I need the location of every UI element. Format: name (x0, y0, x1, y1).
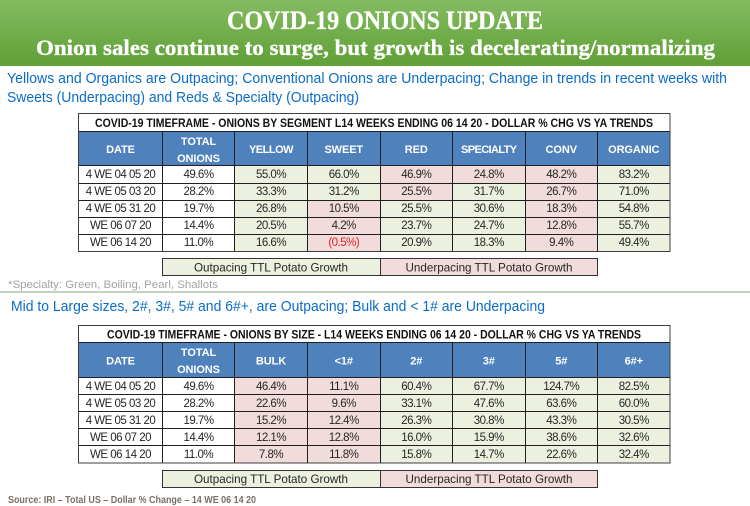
table row: WE 06 07 20: 23.7% (401, 220, 432, 232)
table row: WE 06 14 20: 14.7% (474, 449, 504, 461)
table row: 4 WE 05 31 20: 30.5% (619, 415, 649, 427)
table row: 4 WE 05 03 20: 4 WE 05 03 20 (86, 398, 155, 410)
table row: WE 06 14 20: WE 06 14 20 (90, 237, 151, 249)
legend: segment table (162, 258, 598, 276)
table row: 4 WE 05 03 20: 22.6% (256, 398, 286, 410)
table header row: YELLOW (249, 144, 294, 156)
table row: 4 WE 05 31 20: 18.3% (546, 203, 577, 215)
table header row: TOTAL (181, 136, 216, 148)
table header row: DATE (106, 356, 135, 368)
table header row: 5# (555, 356, 567, 368)
legend: segment table: Underpacing TTL Potato Growth (406, 260, 572, 274)
table row: WE 06 07 20: 4.2% (332, 220, 356, 232)
table row: 4 WE 05 03 20: 28.2% (183, 186, 214, 198)
table row: WE 06 14 20: 49.4% (619, 237, 649, 249)
table row: 4 WE 04 05 20: 4 WE 04 05 20 (86, 169, 155, 181)
table row: 4 WE 05 03 20: 71.0% (619, 186, 649, 198)
table row: 4 WE 05 31 20: 10.5% (329, 203, 359, 215)
table row: WE 06 07 20: WE 06 07 20 (90, 220, 151, 232)
table row: WE 06 14 20: 11.0% (184, 237, 213, 249)
table row: 4 WE 04 05 20: 46.4% (256, 381, 286, 393)
table header row: ONIONS (177, 153, 220, 165)
table row: 4 WE 04 05 20: 66.0% (329, 169, 359, 181)
table row: 4 WE 05 03 20: 33.3% (256, 186, 286, 198)
table header row: CONV (546, 144, 578, 156)
table title row (78, 114, 670, 131)
table row: 4 WE 05 31 20: 26.3% (401, 415, 432, 427)
table row: 4 WE 04 05 20: 49.6% (183, 169, 214, 181)
table header row: RED (405, 144, 428, 156)
table row: 4 WE 05 31 20: 19.7% (183, 415, 214, 427)
segment summary text: Sweets (Underpacing) and Reds & Specialty (Outpacing) (7, 90, 359, 106)
table row: WE 06 07 20 (78, 217, 670, 234)
table row: WE 06 07 20: 12.8% (546, 220, 577, 232)
table row: 4 WE 05 03 20: 31.7% (474, 186, 504, 198)
table row: 4 WE 04 05 20: 49.6% (183, 381, 214, 393)
table row: 4 WE 05 03 20: 26.7% (546, 186, 577, 198)
table row: 4 WE 05 31 20: 54.8% (619, 203, 649, 215)
table row: WE 06 07 20: 24.7% (474, 220, 504, 232)
table row: WE 06 14 20: 16.6% (256, 237, 286, 249)
table row: 4 WE 05 03 20: 47.6% (474, 398, 504, 410)
table header row: ORGANIC (608, 144, 660, 156)
table row: WE 06 07 20: 32.6% (619, 432, 649, 444)
table header row: SPECIALTY (461, 144, 518, 156)
table row: 4 WE 04 05 20: 82.5% (619, 381, 649, 393)
subtitle: Onion sales continue to surge, but growth is decelerating/normalizing (36, 35, 715, 60)
table row: 4 WE 05 31 20: 26.8% (256, 203, 286, 215)
table row: WE 06 07 20: 20.5% (256, 220, 286, 232)
table row: 4 WE 05 31 20: 30.8% (474, 415, 504, 427)
table row: 4 WE 05 31 20 (78, 412, 670, 428)
table row: 4 WE 04 05 20: 60.4% (401, 381, 432, 393)
table row: 4 WE 05 31 20: 4 WE 05 31 20 (86, 203, 155, 215)
table row: WE 06 14 20: 11.0% (184, 449, 213, 461)
table header row: 6#+ (625, 356, 643, 368)
table row: WE 06 14 20: 7.8% (259, 449, 283, 461)
table row: 4 WE 04 05 20 (78, 166, 670, 183)
table row: 4 WE 05 03 20 (78, 183, 670, 200)
table row: 4 WE 04 05 20: 11.1% (329, 381, 359, 393)
table row: 4 WE 04 05 20: 55.0% (256, 169, 286, 181)
legend: size table: Outpacing TTL Potato Growth (194, 472, 348, 486)
table row: WE 06 07 20: 15.9% (474, 432, 504, 444)
table header row (78, 131, 670, 166)
table row: WE 06 14 20: 15.8% (401, 449, 432, 461)
legend: segment table: Outpacing TTL Potato Growth (194, 260, 348, 274)
table row: WE 06 07 20: 55.7% (619, 220, 649, 232)
table row: WE 06 14 20 (78, 234, 670, 252)
table row: 4 WE 05 03 20: 63.6% (546, 398, 577, 410)
title: COVID-19 ONIONS UPDATE (227, 6, 543, 35)
header banner (0, 0, 750, 66)
segment summary text (7, 71, 727, 106)
specialty footnote: *Specialty: Green, Boiling, Pearl, Shallots (8, 279, 219, 291)
table row: WE 06 14 20: 9.4% (549, 237, 574, 249)
table row: 4 WE 04 05 20 (78, 377, 670, 394)
legend: size table: Underpacing TTL Potato Growth (406, 472, 572, 486)
table header row: SWEET (324, 144, 363, 156)
table row: 4 WE 05 03 20: 4 WE 05 03 20 (86, 186, 155, 198)
table row: WE 06 07 20 (78, 428, 670, 446)
table row: 4 WE 05 31 20: 43.3% (546, 415, 577, 427)
table row: 4 WE 04 05 20: 67.7% (474, 381, 504, 393)
table row: 4 WE 04 05 20: 24.8% (474, 169, 504, 181)
table header row: <1# (335, 356, 353, 368)
table row: WE 06 07 20: 38.6% (546, 432, 577, 444)
table row: WE 06 14 20: (0.5%) (328, 237, 360, 249)
table row: WE 06 14 20: 20.9% (401, 237, 432, 249)
table row: 4 WE 05 31 20: 25.5% (401, 203, 432, 215)
table row: WE 06 07 20: 12.1% (256, 432, 286, 444)
table title row: COVID-19 TIMEFRAME - ONIONS BY SIZE - L14 WEEKS ENDING 06 14 20 - DOLLAR % CHG VS YA TRENDS (107, 330, 641, 342)
table row: WE 06 07 20: WE 06 07 20 (90, 432, 151, 444)
table row: WE 06 14 20: 18.3% (474, 237, 504, 249)
table row: 4 WE 05 31 20: 12.4% (329, 415, 359, 427)
table row: 4 WE 05 03 20: 9.6% (332, 398, 356, 410)
table: onions by segment (78, 114, 670, 252)
table row: 4 WE 05 03 20: 33.1% (401, 398, 432, 410)
table row: WE 06 07 20: 12.8% (329, 432, 359, 444)
table row: WE 06 07 20: 14.4% (183, 432, 214, 444)
segment summary text: Yellows and Organics are Outpacing; Conventional Onions are Underpacing; Change in trends in recent weeks with (7, 71, 727, 87)
table header row: DATE (106, 144, 135, 156)
table row: WE 06 14 20: 22.6% (546, 449, 577, 461)
table row: 4 WE 05 31 20: 4 WE 05 31 20 (86, 415, 155, 427)
table header row: BULK (256, 356, 286, 368)
table row: WE 06 07 20: 16.0% (401, 432, 432, 444)
table row: 4 WE 05 03 20: 25.5% (401, 186, 432, 198)
table header row: 3# (483, 356, 495, 368)
table row: WE 06 14 20: WE 06 14 20 (90, 449, 151, 461)
table row: 4 WE 05 03 20 (78, 394, 670, 412)
table row: WE 06 14 20: 32.4% (619, 449, 649, 461)
table row: 4 WE 04 05 20: 46.9% (401, 169, 432, 181)
table row: 4 WE 05 31 20 (78, 200, 670, 217)
table title row (78, 325, 670, 342)
table: onions by size (78, 325, 670, 463)
legend: size table (162, 470, 598, 488)
table row: WE 06 07 20: 14.4% (183, 220, 214, 232)
table row: WE 06 14 20: 11.8% (329, 449, 359, 461)
table row: 4 WE 05 03 20: 31.2% (329, 186, 359, 198)
table row: 4 WE 04 05 20: 48.2% (546, 169, 577, 181)
table row: 4 WE 04 05 20: 83.2% (619, 169, 649, 181)
table row: 4 WE 05 03 20: 28.2% (183, 398, 214, 410)
size summary text: Mid to Large sizes, 2#, 3#, 5# and 6#+, are Outpacing; Bulk and < 1# are Underpacing (11, 299, 545, 315)
table title row: COVID-19 TIMEFRAME - ONIONS BY SEGMENT L14 WEEKS ENDING 06 14 20 - DOLLAR % CHG VS YA TRENDS (95, 118, 653, 130)
table header row: TOTAL (181, 347, 216, 359)
table row: 4 WE 05 31 20: 30.6% (474, 203, 504, 215)
table row: 4 WE 04 05 20: 4 WE 04 05 20 (86, 381, 155, 393)
table row: 4 WE 04 05 20: 124.7% (543, 381, 580, 393)
table header row: ONIONS (177, 364, 220, 376)
table header row: 2# (410, 356, 422, 368)
table row: 4 WE 05 31 20: 19.7% (183, 203, 214, 215)
table header row (78, 342, 670, 377)
source note: Source: IRI – Total US – Dollar % Change – 14 WE 06 14 20 (8, 495, 256, 506)
table row: 4 WE 05 31 20: 15.2% (256, 415, 286, 427)
table row: 4 WE 05 03 20: 60.0% (619, 398, 649, 410)
table row: WE 06 14 20 (78, 446, 670, 463)
